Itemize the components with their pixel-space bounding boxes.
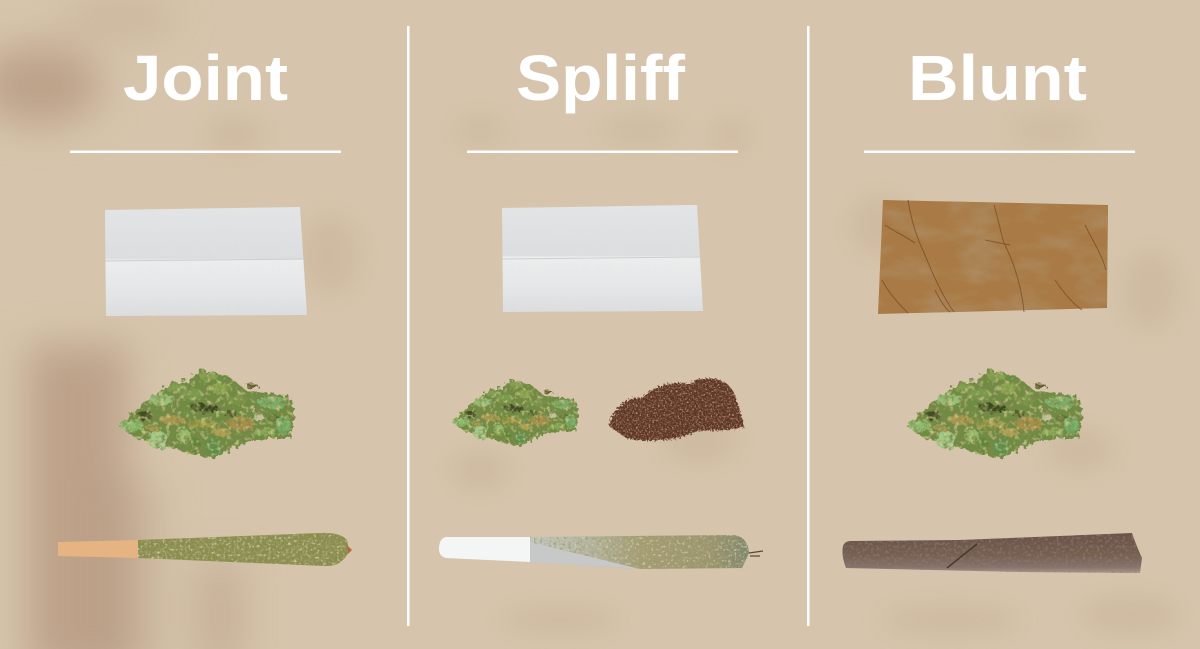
rolling paper: Spliff [502,205,703,312]
title: Spliff: Spliff [516,42,686,114]
heading rule: Joint [70,150,341,153]
tobacco pile: Spliff [609,378,744,441]
column divider left [407,26,410,626]
column divider right [807,26,810,626]
cannabis pile: Joint [118,369,294,458]
spliff [439,535,763,569]
paper tip [439,537,530,562]
heading rule: Blunt [864,150,1135,153]
cannabis pile: Spliff [451,379,578,446]
tobacco leaf wrap: Blunt [878,200,1108,314]
title: Joint: Joint [123,42,288,114]
joint [58,533,352,566]
cannabis pile: Blunt [906,369,1082,458]
filter tip [58,540,139,558]
spliff body [530,535,749,569]
cannabis body [138,533,349,566]
blunt [842,533,1142,573]
heading rule: Spliff [467,150,738,153]
rolling paper: Joint [105,207,307,316]
title: Blunt: Blunt [908,42,1087,114]
